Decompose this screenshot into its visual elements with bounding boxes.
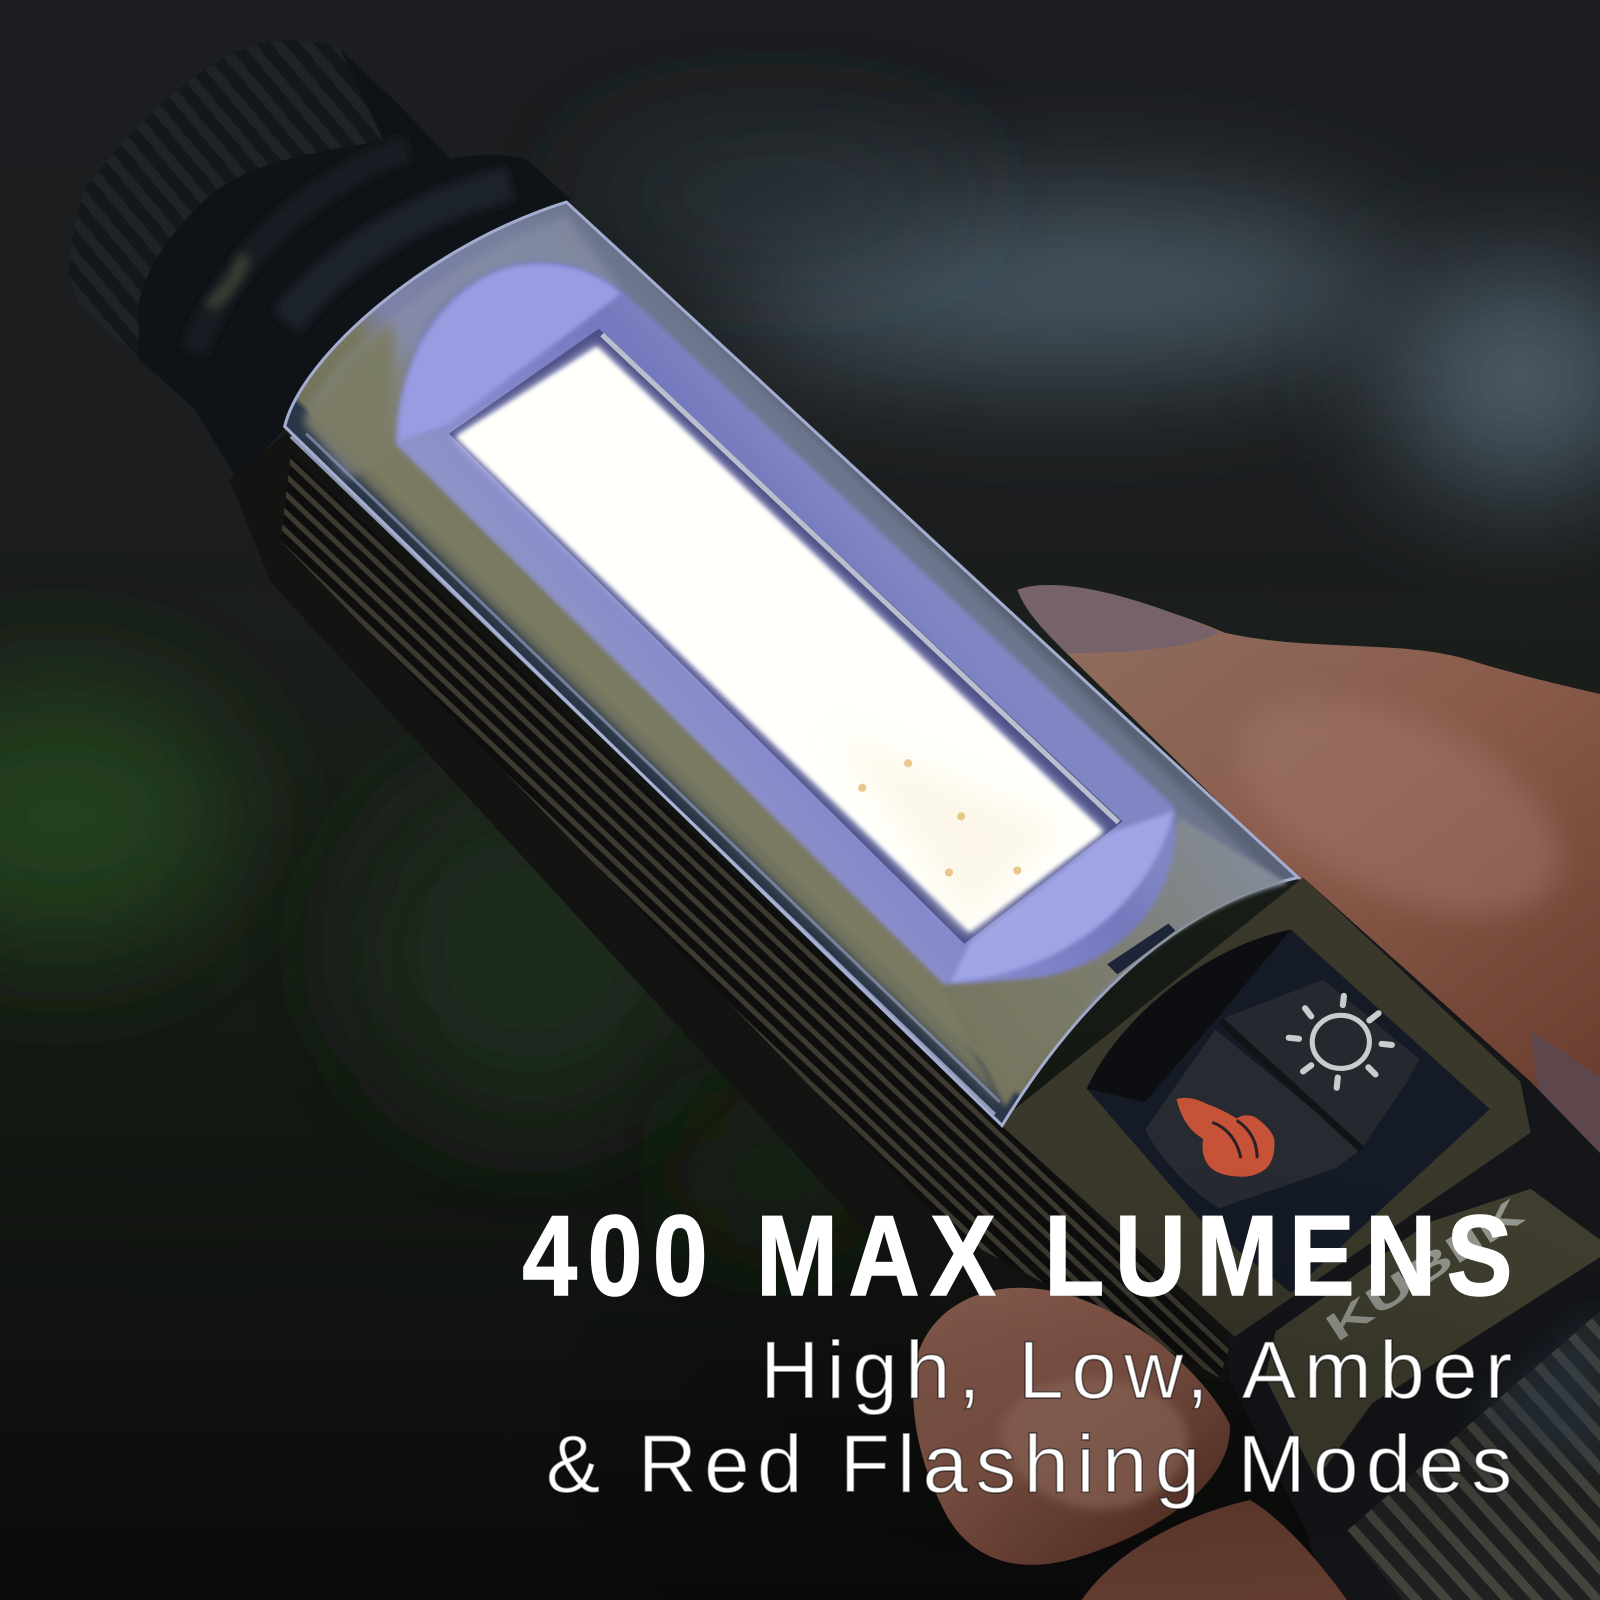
subheading line: High, Low, Amber: High, Low, Amber — [760, 1325, 1512, 1416]
fingernail — [1017, 585, 1219, 653]
thumbnail — [1000, 1378, 1188, 1509]
tail section — [998, 878, 1600, 1600]
icon: brightness sun — [1289, 996, 1392, 1088]
caption — [522, 1192, 1512, 1510]
LED panel frame — [449, 329, 1122, 944]
heading: 400 MAX LUMENS: 400 MAX LUMENS — [522, 1192, 1512, 1320]
icon: flame — [1177, 1098, 1275, 1177]
hand: thumb — [913, 1288, 1347, 1600]
purple glow frame — [396, 262, 1176, 985]
logo text: KUBIIK — [1318, 1191, 1532, 1350]
head-end housing highlight — [306, 214, 624, 480]
lower dome glow — [951, 811, 1173, 982]
dark body side — [230, 434, 1235, 1383]
subheading line: & Red Flashing Modes: & Red Flashing Modes — [546, 1419, 1512, 1510]
LED frame highlight — [602, 335, 1118, 822]
button pad — [1087, 930, 1490, 1293]
status slot — [1107, 923, 1176, 974]
LED panel — [454, 345, 1105, 934]
knurled end cap — [68, 40, 570, 480]
button: brightness — [1220, 980, 1419, 1149]
clear edge highlight — [291, 437, 995, 1114]
hand: upper finger — [1017, 585, 1600, 1224]
clear lens housing — [285, 202, 1298, 1126]
button: flame — [1145, 1030, 1361, 1208]
ribbed band — [281, 454, 1230, 1378]
upper dome glow — [400, 264, 620, 441]
lower finger — [1082, 1500, 1347, 1600]
soft dark shade behind caption — [653, 1276, 1592, 1582]
knurled tail ring — [1347, 1311, 1600, 1600]
olive end plate — [944, 816, 1288, 1107]
